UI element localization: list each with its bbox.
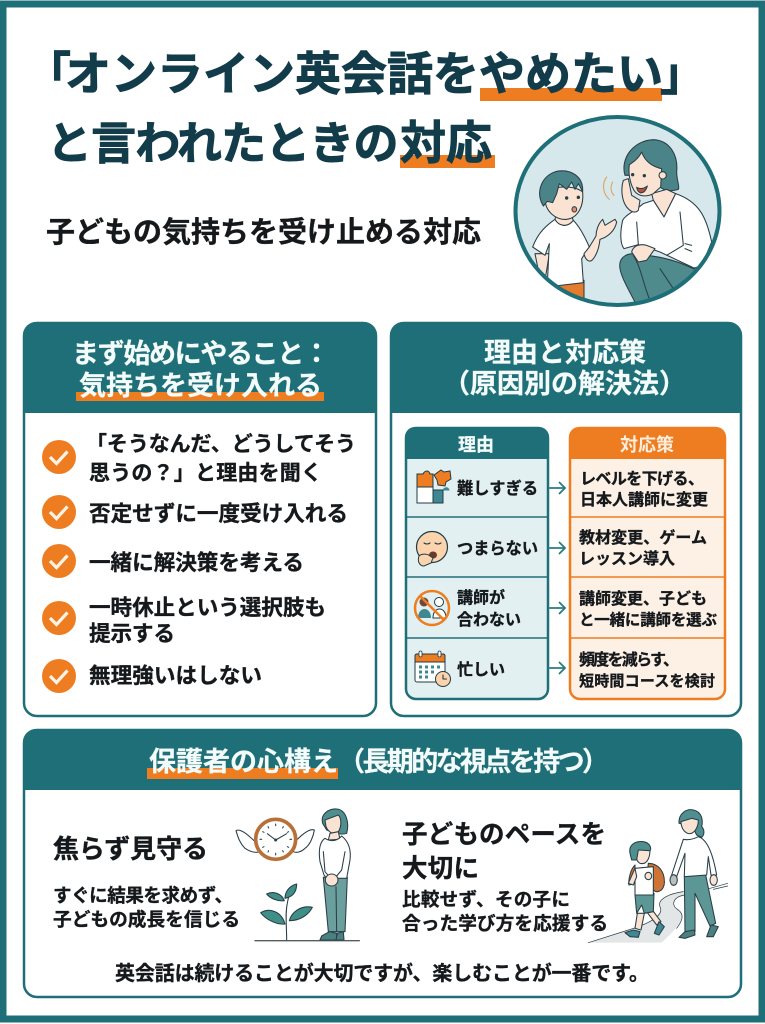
checklist: 思うの？」と理由を聞く [89, 462, 322, 485]
checklist: 否定せずに一度受け入れる [89, 501, 348, 526]
boy [534, 253, 548, 276]
table column: reasons: 忙しい [457, 661, 505, 679]
panel header: reasons and solutions: 理由と対応策 [484, 338, 646, 368]
illustration: mother listening to child [516, 117, 720, 312]
title: オンライン英会話をやめたい [65, 48, 663, 100]
title [25, 48, 706, 169]
mother [624, 140, 679, 191]
illustration: winged clock, sprout and woman [236, 809, 359, 941]
table column: reasons: 難しすぎる [457, 479, 538, 498]
title: 対応 [400, 117, 492, 169]
block: watch without rushing: 焦らず見守る [53, 834, 208, 864]
table column: reasons: 講師が [457, 588, 505, 607]
arrows [548, 482, 565, 674]
block: child's pace: 大切に [402, 855, 479, 883]
panel: reasons and solutions [390, 322, 742, 716]
table column: solutions: 教材変更、ゲーム [579, 528, 707, 547]
panel: parent mindset [23, 729, 742, 997]
checklist: 無理強いはしない [89, 663, 262, 688]
title: 」 [660, 48, 706, 100]
panel header: first steps: まず始めにやること： [72, 339, 330, 369]
panel header: reasons and solutions [390, 322, 742, 413]
icon: calendar and clock [415, 651, 450, 686]
table column: reasons [405, 427, 549, 699]
table column: reasons: 合わない [457, 611, 521, 629]
panel header: parent mindset: （長期的な視点を持つ） [338, 747, 609, 777]
table column: solutions [569, 427, 726, 699]
block: child's pace: 比較せず、その子に [402, 889, 570, 910]
panel header: first steps: 気持ちを受け入れる [79, 371, 322, 401]
checklist: 提示する [89, 621, 175, 646]
icon: puzzle [417, 470, 451, 503]
table column: solutions: 講師変更、子ども [579, 589, 707, 608]
panel header: parent mindset [23, 729, 742, 790]
table column: solutions: 対応策 [620, 435, 674, 455]
table column: solutions: と一緒に講師を選ぶ [579, 610, 717, 629]
checklist [42, 433, 356, 693]
icon: mismatch people [415, 591, 449, 625]
panel header: parent mindset: 保護者の心構え [149, 747, 338, 777]
table column: reasons: 理由 [458, 435, 494, 455]
panel header: reasons and solutions: （原因別の解決法） [443, 369, 686, 399]
table column: solutions: レッスン導入 [579, 549, 675, 568]
table column: solutions: レベルを下げる、 [580, 470, 704, 488]
icon: yawning face [416, 532, 448, 566]
title: と言われたときの [47, 118, 398, 169]
title: 「 [25, 48, 71, 100]
block: watch without rushing: すぐに結果を求めず、 [53, 885, 233, 906]
sound waves [604, 177, 614, 199]
block: child's pace [402, 821, 608, 934]
block: watch without rushing [53, 834, 240, 930]
checklist: 一時休止という選択肢も [89, 595, 326, 620]
checklist: 「そうなんだ、どうしてそう [86, 433, 356, 456]
subtitle: 子どもの気持ちを受け止める対応 [46, 216, 481, 249]
illustration: parent and child walking [588, 810, 728, 943]
table column: reasons: つまらない [457, 540, 538, 558]
table column: solutions: 短時間コースを検討 [579, 672, 715, 690]
block: child's pace: 子どものペースを [402, 821, 606, 849]
table column: solutions: 頻度を減らす、 [579, 650, 679, 669]
block: watch without rushing: 子どもの成長を信じる [53, 909, 240, 930]
panel header: first steps [23, 322, 377, 413]
block: child's pace: 合った学び方を応援する [402, 913, 608, 934]
checklist: 一緒に解決策を考える [89, 550, 304, 575]
closing message: 英会話は続けることが大切ですが、楽しむことが一番です。 [115, 961, 649, 985]
panel: first steps [23, 322, 377, 716]
table column: solutions: 日本人講師に変更 [580, 490, 708, 509]
